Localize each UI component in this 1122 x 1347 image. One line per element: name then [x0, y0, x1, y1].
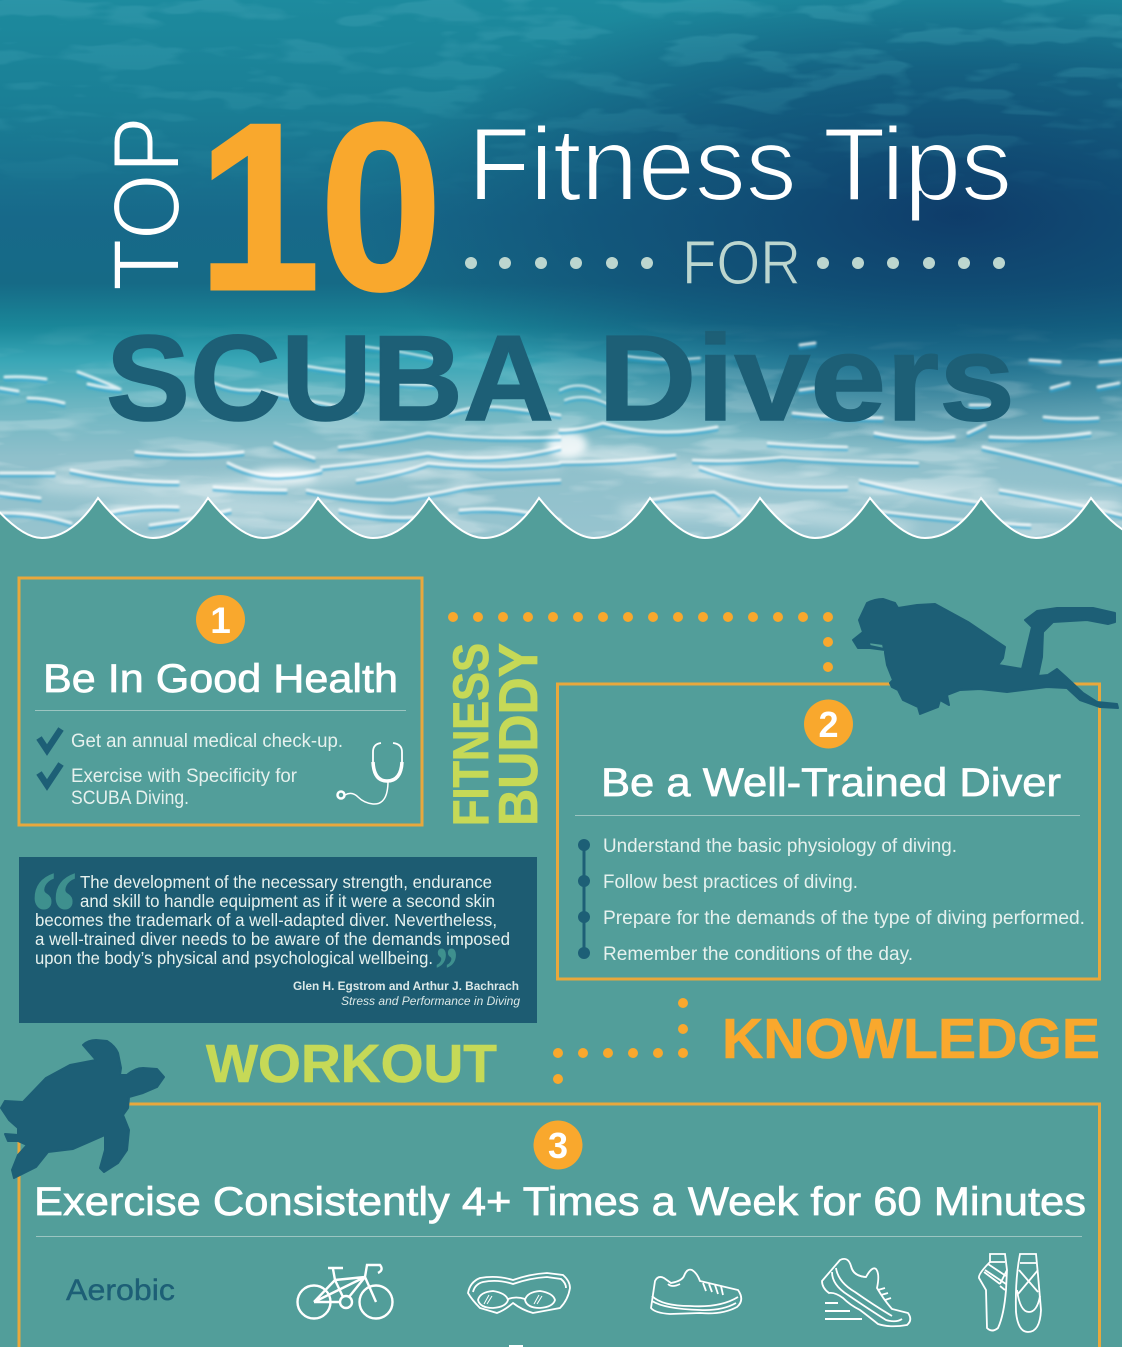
title: FOR with dotted rules	[465, 229, 1005, 298]
heading: Be a Well-Trained Diver: Be a Well-Trained Diver	[601, 761, 1061, 805]
tip 2 list: Prepare for the demands of the type of diving performed.	[603, 908, 1085, 929]
panel: tip 1	[19, 578, 422, 825]
attribution: Glen H. Egstrom and Arthur J. Bachrach	[293, 979, 519, 993]
icon: scuba diver silhouette	[853, 599, 1118, 714]
timeline bullets	[578, 839, 590, 959]
tip 2 list: Remember the conditions of the day.	[603, 944, 913, 965]
text: specificity	[71, 766, 298, 809]
title: TOP: TOP	[94, 116, 200, 291]
icon: stethoscope	[338, 743, 402, 804]
label: FITNESS BUDDY	[443, 643, 549, 826]
label: Aerobic: Aerobic	[66, 1274, 175, 1307]
label: FITNESS BUDDY: FITNESS	[443, 643, 499, 826]
icon: check mark 2	[39, 764, 61, 785]
title: Fitness Tips: Fitness Tips	[468, 107, 1012, 223]
number badge 2: 2	[818, 704, 839, 745]
number badge 3	[534, 1120, 582, 1170]
label: FITNESS BUDDY: BUDDY	[487, 643, 549, 826]
text: specificity: SCUBA Diving.	[71, 788, 189, 809]
attribution: Stress and Performance in Diving	[341, 994, 520, 1008]
icon: closing quote mark: ”	[435, 934, 458, 1005]
number badge 2	[804, 700, 853, 748]
title: FOR with dotted rules: FOR	[682, 229, 801, 298]
panel: tip 2	[558, 684, 1100, 979]
tip 2 list: Follow best practices of diving.	[603, 872, 858, 893]
number badge 1: 1	[210, 600, 231, 641]
tip 2 list: Understand the basic physiology of diving.	[603, 836, 957, 857]
title: SCUBA Divers	[106, 310, 1015, 446]
title: SCUBA Divers: SCUBA	[106, 310, 554, 446]
title: SCUBA Divers: Divers	[598, 310, 1015, 446]
label: KNOWLEDGE: KNOWLEDGE	[722, 1007, 1100, 1071]
icon: goggles	[468, 1273, 570, 1313]
wave edge	[0, 498, 1122, 560]
dotted connector: knowledge to workout	[553, 998, 688, 1084]
quote text	[35, 872, 510, 968]
text: medical check-up: Get an annual medical check-up.	[71, 731, 343, 752]
next row icon fragment	[509, 1345, 523, 1347]
quote text: becomes the trademark of a well-adapted diver. Nevertheless,	[35, 910, 497, 930]
quote text: The development of the necessary strength, endurance	[80, 872, 492, 892]
number badge 1	[196, 595, 245, 644]
label: WORKOUT: WORKOUT	[206, 1034, 497, 1094]
quote text: upon the body’s physical and psychological wellbeing.	[35, 948, 433, 968]
icon: ballet shoes	[979, 1254, 1041, 1332]
icon: sneaker	[651, 1270, 741, 1314]
number badge 3: 3	[548, 1125, 568, 1166]
quote text: a well-trained diver needs to be aware of the demands imposed	[35, 929, 510, 949]
dotted connector: fitness buddy to diver	[448, 612, 833, 672]
title: 10: 10	[198, 75, 442, 340]
text: specificity: Exercise with Specificity for	[71, 766, 298, 787]
tip 2 list	[603, 836, 1085, 965]
heading: exercise consistently: Exercise Consistently 4+ Times a Week for 60 Minutes	[34, 1180, 1086, 1224]
panel: tip 3	[19, 1104, 1100, 1347]
underwater photo header	[0, 0, 1122, 545]
icon: check mark 1	[39, 729, 61, 750]
icon: opening quote mark: “	[30, 846, 78, 979]
icon: sea turtle silhouette	[1, 1040, 164, 1178]
icon: bicycle	[298, 1265, 392, 1318]
icon: running shoe	[822, 1259, 910, 1326]
quote text: and skill to handle equipment as if it were a second skin	[80, 891, 495, 911]
heading: Be In Good Health: Be In Good Health	[43, 657, 398, 701]
attribution	[293, 979, 520, 1008]
panel: quote	[19, 846, 537, 1023]
